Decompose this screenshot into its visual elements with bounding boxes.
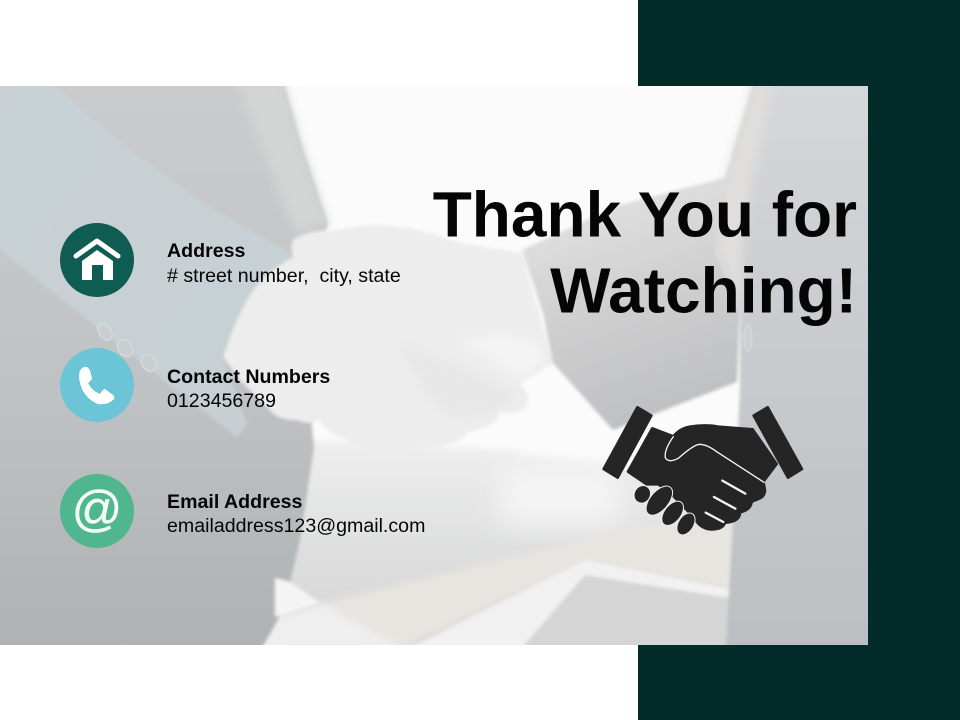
title: Watching! <box>550 254 857 326</box>
email text: Email Address <box>167 491 302 513</box>
address text: # street number, city, state <box>167 265 401 287</box>
title: Thank You for <box>433 178 857 250</box>
contact item: phone <box>60 348 330 422</box>
lapel and torso highlights <box>246 86 767 304</box>
faded handshake photo panel <box>0 70 880 660</box>
icon: handshake <box>604 407 802 538</box>
left and right hands <box>223 225 553 458</box>
icon: at sign: @ <box>72 481 122 537</box>
contact item: email <box>60 474 425 548</box>
contact numbers text: 0123456789 <box>167 390 276 412</box>
icon: house <box>60 223 134 297</box>
contact item: address <box>60 223 401 297</box>
address text: Address <box>167 240 246 262</box>
email text <box>167 491 425 537</box>
address text <box>167 240 401 287</box>
title <box>433 178 857 326</box>
email text: emailaddress123@gmail.com <box>167 515 425 537</box>
contact numbers text: Contact Numbers <box>167 366 330 388</box>
sleeve buttons <box>95 321 752 374</box>
icon: at sign <box>60 474 134 548</box>
dark green background panel <box>638 0 960 720</box>
contact numbers text <box>167 366 330 412</box>
icon: phone <box>60 348 134 422</box>
